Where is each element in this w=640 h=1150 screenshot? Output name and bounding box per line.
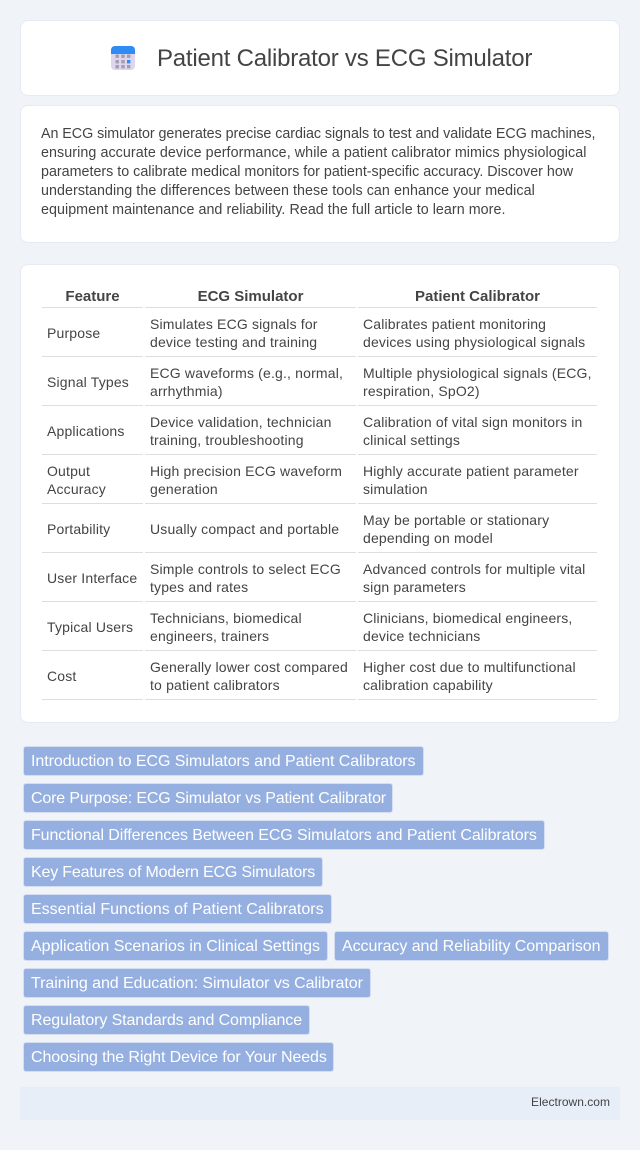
- row: User Interface: Simple controls to select ECG: [150, 561, 341, 577]
- section links: [23, 746, 609, 1072]
- row: Typical Users: Technicians, biomedical: [150, 610, 302, 626]
- row: Typical Users: Typical Users: [47, 619, 133, 635]
- tag: introduction: [23, 746, 424, 776]
- row: Signal Types: [47, 365, 592, 399]
- tag: accuracy comparison: [334, 931, 609, 961]
- tag: regulatory standards: Regulatory Standards and Compliance: [31, 1012, 302, 1029]
- row: Output Accuracy: simulation: [363, 481, 428, 497]
- row: Purpose: Purpose: [47, 325, 100, 341]
- tag: key features: Key Features of Modern ECG Simulators: [31, 864, 315, 881]
- row: Signal Types: Signal Types: [47, 374, 129, 390]
- panel: introduction text: ensuring accurate device performance, while a patient calibrator mimics physiological: [41, 145, 587, 161]
- title: Patient Calibrator vs ECG Simulator: [157, 45, 532, 72]
- tag: introduction: Introduction to ECG Simulators and Patient Calibrators: [31, 753, 416, 770]
- row: Output Accuracy: Highly accurate patient parameter: [363, 463, 579, 479]
- row: Applications: Device validation, technician: [150, 414, 332, 430]
- tag: choosing device: [23, 1042, 334, 1072]
- row: User Interface: sign parameters: [363, 579, 466, 595]
- tag: essential functions: [23, 894, 332, 924]
- row: Signal Types: respiration, SpO2): [363, 383, 480, 399]
- footer credit: Electrown.com: [531, 1095, 610, 1109]
- table header: Patient Calibrator: [415, 288, 540, 305]
- row: Output Accuracy: generation: [150, 481, 218, 497]
- row: User Interface: User Interface: [47, 570, 137, 586]
- row: Signal Types: arrhythmia): [150, 383, 223, 399]
- tag: core purpose: [23, 783, 393, 813]
- tag: functional differences: Functional Differences Between ECG Simulators and Patient Calibrators: [31, 827, 537, 844]
- tag: core purpose: Core Purpose: ECG Simulator vs Patient Calibrator: [31, 790, 386, 807]
- panel: title header: [20, 20, 620, 96]
- row: Applications: [47, 414, 582, 448]
- row: User Interface: types and rates: [150, 579, 248, 595]
- row: Cost: Cost: [47, 668, 76, 684]
- row: Cost: [47, 659, 576, 693]
- row: Cost: calibration capability: [363, 677, 493, 693]
- table header: [65, 288, 540, 305]
- panel: introduction text: understanding the differences between these tools can enhance your medical: [41, 183, 535, 199]
- tag: choosing device: Choosing the Right Device for Your Needs: [31, 1049, 327, 1066]
- row: Portability: [47, 512, 550, 546]
- row: Typical Users: [47, 610, 572, 644]
- row: Typical Users: engineers, trainers: [150, 628, 269, 644]
- panel: introduction text: parameters to calibrate medical monitors for patient-specific accuracy. Discover how: [41, 164, 573, 180]
- row: Output Accuracy: High precision ECG waveform: [150, 463, 342, 479]
- row: Purpose: Calibrates patient monitoring: [363, 316, 546, 332]
- tag: accuracy comparison: Accuracy and Reliability Comparison: [342, 938, 600, 955]
- row: Portability: depending on model: [363, 530, 493, 546]
- tag: application scenarios: Application Scenarios in Clinical Settings: [31, 938, 320, 955]
- panel: introduction text: An ECG simulator generates precise cardiac signals to test and validate ECG machines,: [41, 126, 595, 142]
- row: Output Accuracy: [47, 463, 579, 497]
- row: Purpose: [47, 316, 585, 350]
- row: Purpose: Simulates ECG signals for: [150, 316, 318, 332]
- row: Signal Types: Multiple physiological signals (ECG,: [363, 365, 592, 381]
- row: Portability: Usually compact and portable: [150, 521, 339, 537]
- row: Portability: May be portable or stationary: [363, 512, 549, 528]
- row: Applications: Applications: [47, 423, 125, 439]
- row: Purpose: devices using physiological signals: [363, 334, 585, 350]
- panel: introduction text: [20, 105, 620, 243]
- row: Portability: Portability: [47, 521, 110, 537]
- row: Typical Users: device technicians: [363, 628, 480, 644]
- row: Output Accuracy: Output: [47, 463, 90, 479]
- tag: functional differences: [23, 820, 545, 850]
- panel: introduction text: equipment maintenance and reliability. Read the full article to learn more.: [41, 202, 505, 218]
- footer: [20, 1087, 620, 1120]
- row: Purpose: device testing and training: [150, 334, 317, 350]
- row: Signal Types: ECG waveforms (e.g., normal,: [150, 365, 343, 381]
- tag: training and education: [23, 968, 371, 998]
- panel: comparison table: [20, 264, 620, 723]
- row: Cost: Generally lower cost compared: [150, 659, 348, 675]
- table header: ECG Simulator: [198, 288, 303, 305]
- tag: regulatory standards: [23, 1005, 310, 1035]
- tag: application scenarios: [23, 931, 328, 961]
- row: User Interface: Advanced controls for multiple vital: [363, 561, 585, 577]
- table header: Feature: [65, 288, 120, 305]
- row: Typical Users: Clinicians, biomedical engineers,: [363, 610, 572, 626]
- tag: key features: [23, 857, 323, 887]
- row: Applications: Calibration of vital sign monitors in: [363, 414, 582, 430]
- tag: training and education: Training and Education: Simulator vs Calibrator: [31, 975, 363, 992]
- row: User Interface: [47, 561, 585, 595]
- row: Output Accuracy: Accuracy: [47, 481, 106, 497]
- row: Applications: clinical settings: [363, 432, 460, 448]
- row: Cost: to patient calibrators: [150, 677, 280, 693]
- row: Applications: training, troubleshooting: [150, 432, 304, 448]
- row: Cost: Higher cost due to multifunctional: [363, 659, 576, 675]
- tag: essential functions: Essential Functions of Patient Calibrators: [31, 901, 324, 918]
- icon: calendar grid: [111, 46, 135, 70]
